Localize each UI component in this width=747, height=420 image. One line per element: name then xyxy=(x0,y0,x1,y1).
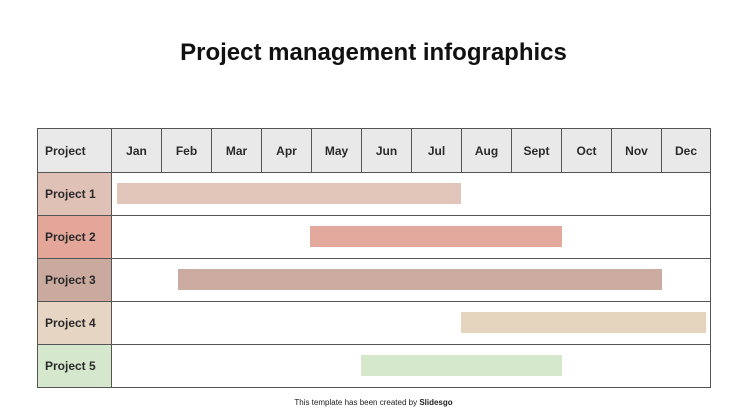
row: Project 2: Project 2 xyxy=(45,230,96,244)
row: Project 4 xyxy=(37,302,711,344)
row: Project 1: Project 1 xyxy=(45,187,96,201)
header row xyxy=(37,128,711,172)
row: Project 3: Project 3 xyxy=(45,273,96,287)
header row: May xyxy=(325,144,348,158)
header row: Dec xyxy=(675,144,697,158)
header row: Mar xyxy=(226,144,247,158)
header row: Feb xyxy=(176,144,197,158)
header row: Apr xyxy=(276,144,297,158)
row: Project 4: Project 4 xyxy=(45,316,96,330)
header row: Aug xyxy=(475,144,498,158)
header row: Jan xyxy=(126,144,147,158)
header row: Project xyxy=(45,144,86,158)
header row: Oct xyxy=(576,144,596,158)
row: Project 3 xyxy=(37,259,711,301)
header row: Sept xyxy=(523,144,550,158)
title: Project management infographics xyxy=(180,39,567,66)
row: Project 2 xyxy=(37,216,711,258)
header row: Jul xyxy=(428,144,445,158)
row: Project 5: Project 5 xyxy=(45,359,96,373)
gantt table xyxy=(37,128,711,388)
header row: Jun xyxy=(376,144,397,158)
header row: Nov xyxy=(625,144,648,158)
footer credit: This template has been created by Slidesgo xyxy=(294,398,453,407)
row: Project 5 xyxy=(37,345,711,388)
row: Project 1 xyxy=(37,173,711,215)
